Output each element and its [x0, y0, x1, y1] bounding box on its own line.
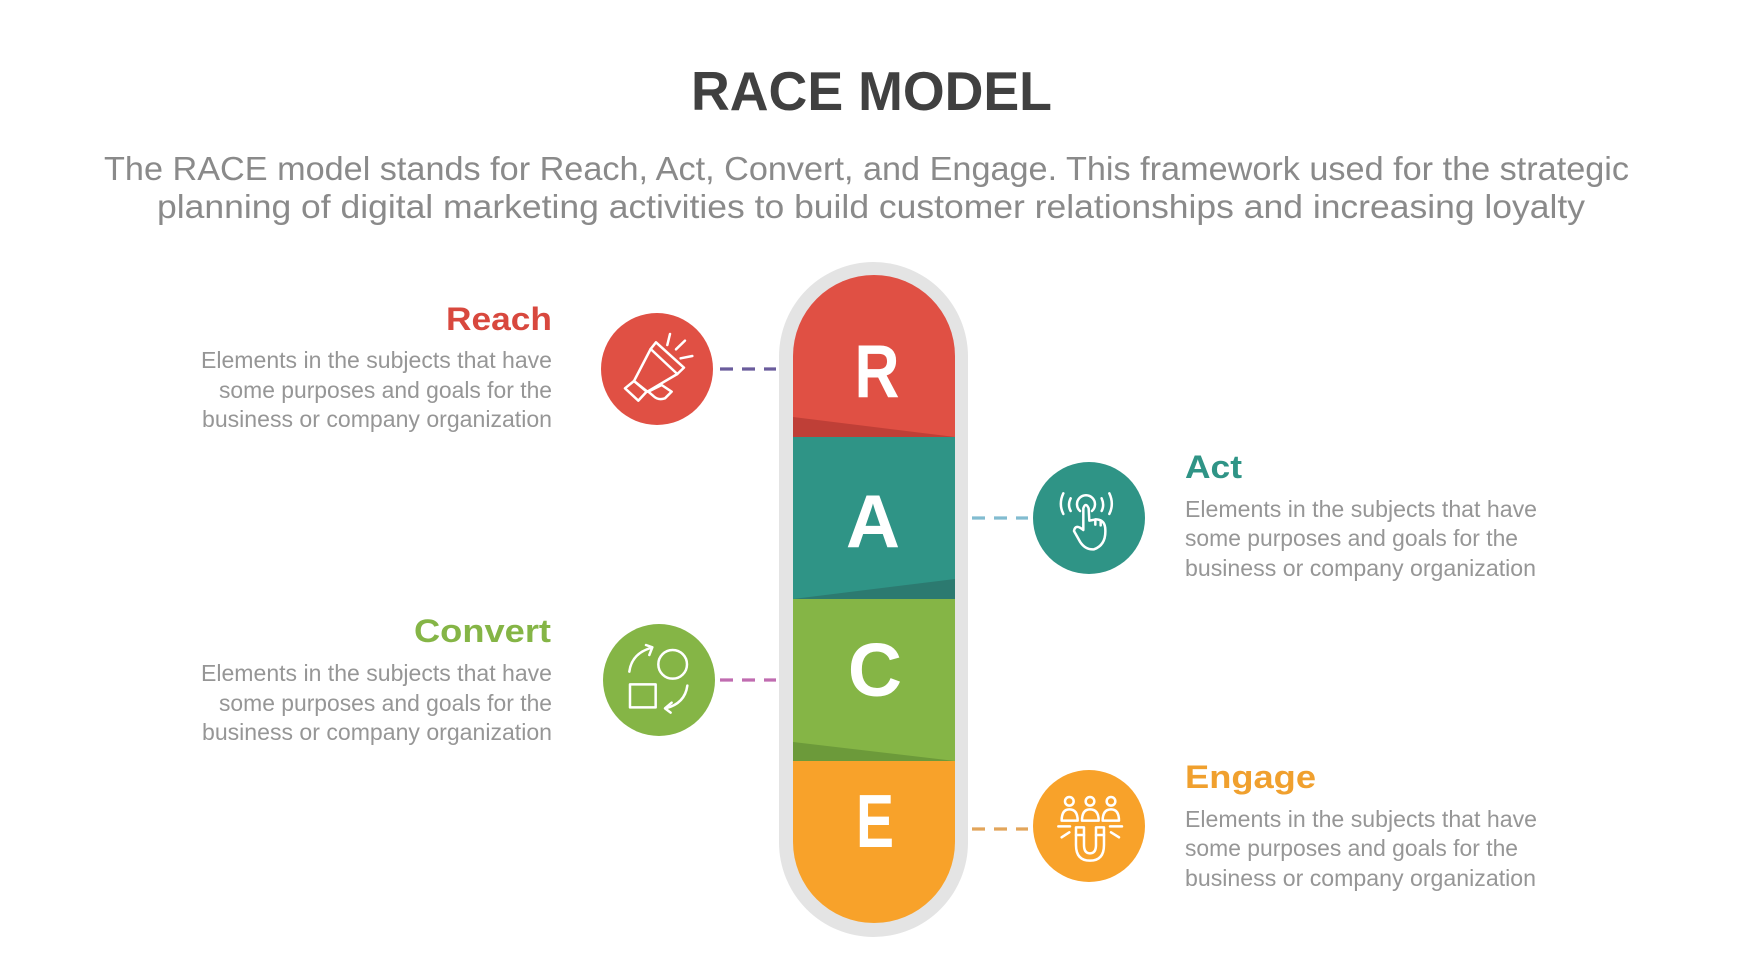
connector: engage [972, 827, 1028, 831]
body: convert: some purposes and goals for the [219, 690, 552, 716]
body: act [1185, 496, 1537, 581]
pill outer track [779, 262, 968, 937]
body: reach: some purposes and goals for the [219, 377, 552, 403]
segment C: C [848, 628, 902, 712]
icon: people and magnet on orange circle [1033, 770, 1145, 882]
text block: act [1185, 449, 1537, 581]
body: reach: business or company organization [202, 406, 552, 432]
segment C [793, 599, 955, 761]
text block: convert [201, 613, 552, 745]
body: reach [201, 347, 552, 432]
segment R [793, 275, 955, 437]
connector: reach [720, 367, 776, 371]
connector: act [972, 516, 1028, 520]
body: engage: business or company organization [1185, 865, 1536, 891]
heading: engage: Engage [1185, 759, 1316, 795]
title: RACE MODEL [691, 60, 1052, 122]
icon: touch hand on teal circle [1033, 462, 1145, 574]
body: reach: Elements in the subjects that have [201, 347, 552, 373]
body: engage: some purposes and goals for the [1185, 835, 1518, 861]
body: act: Elements in the subjects that have [1185, 496, 1537, 522]
segment E [793, 761, 955, 923]
body: engage [1185, 806, 1537, 891]
subtitle text: planning of digital marketing activities to build customer relationships and increasing loyalty [157, 188, 1586, 225]
segment A [793, 437, 955, 599]
subtitle text: The RACE model stands for Reach, Act, Convert, and Engage. This framework used for the strategic [104, 150, 1629, 187]
central RACE pill [779, 262, 968, 937]
segment R: R [854, 329, 900, 413]
heading: convert: Convert [414, 613, 551, 649]
connector: convert [720, 678, 776, 682]
body: convert [201, 660, 552, 745]
segment A: A [846, 479, 900, 563]
subtitle text [104, 150, 1629, 225]
segment E: E [856, 779, 894, 863]
heading: act: Act [1185, 449, 1242, 485]
body: engage: Elements in the subjects that have [1185, 806, 1537, 832]
text block: reach [201, 301, 552, 432]
body: act: some purposes and goals for the [1185, 525, 1518, 551]
text block: engage [1185, 759, 1537, 891]
heading: reach: Reach [446, 301, 552, 337]
pill segments [793, 275, 955, 923]
icon: shapes and arrows on green circle [603, 624, 715, 736]
body: convert: Elements in the subjects that have [201, 660, 552, 686]
icon: megaphone on red circle [601, 313, 713, 425]
body: convert: business or company organization [202, 719, 552, 745]
body: act: business or company organization [1185, 555, 1536, 581]
